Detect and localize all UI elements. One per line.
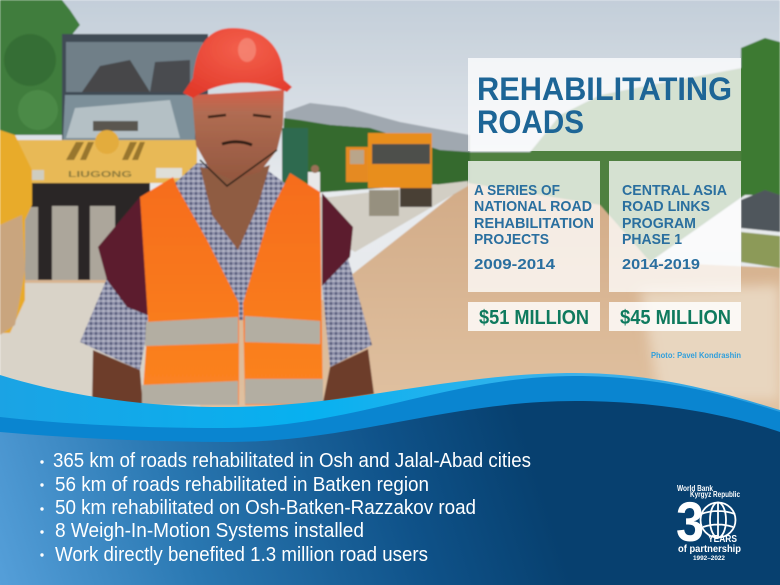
panel: national road rehabilitation projects: REHABILITATION bbox=[474, 215, 594, 232]
results bullet list: 8 Weigh-In-Motion Systems installed bbox=[55, 520, 364, 542]
panel: Central Asia Road Links: PHASE 1 bbox=[622, 231, 682, 248]
results bullet list: Work directly benefited 1.3 million road users bbox=[55, 544, 428, 566]
results bullet list: 365 km of roads rehabilitated in Osh and Jalal-Abad cities bbox=[53, 450, 531, 472]
worker sleeves bbox=[80, 255, 372, 370]
panel: national road rehabilitation projects: PROJECTS bbox=[474, 231, 549, 248]
panel: national road rehabilitation projects bbox=[468, 161, 600, 292]
title panel: REHABILITATING bbox=[477, 71, 732, 107]
panel: Central Asia Road Links: 2014-2019 bbox=[622, 256, 700, 273]
results bullet list: 50 km rehabilitated on Osh-Batken-Razzakov road bbox=[55, 497, 476, 519]
photo: road worker in front of road machinery: LIUGONG bbox=[68, 170, 132, 179]
photo credit: Photo: Pavel Kondrashin bbox=[651, 351, 741, 360]
funding: $45 million: $45 MILLION bbox=[620, 307, 731, 329]
funding: $51 million: $51 MILLION bbox=[479, 307, 589, 329]
panel: national road rehabilitation projects: 2009-2014 bbox=[474, 256, 556, 273]
helmet bbox=[183, 28, 292, 98]
dump truck bbox=[346, 147, 370, 182]
title panel bbox=[468, 58, 741, 151]
panel: Central Asia Road Links: CENTRAL ASIA bbox=[622, 182, 727, 199]
panel: national road rehabilitation projects: A SERIES OF bbox=[474, 182, 560, 199]
face bbox=[192, 90, 284, 180]
shirt bbox=[175, 163, 297, 320]
logo: World Bank 30 years: World Bank bbox=[677, 484, 713, 493]
photo: road worker in front of road machinery bbox=[0, 0, 780, 440]
wave band bbox=[0, 373, 780, 585]
logo: World Bank 30 years: YEARS bbox=[708, 534, 737, 545]
logo: World Bank 30 years bbox=[676, 484, 741, 562]
funding: $45 million bbox=[609, 302, 741, 331]
logo: World Bank 30 years: of partnership bbox=[678, 544, 741, 555]
panel: Central Asia Road Links: PROGRAM bbox=[622, 215, 696, 232]
ground bbox=[0, 183, 780, 440]
funding: $51 million bbox=[468, 302, 600, 331]
results bullet list: 56 km of roads rehabilitated in Batken region bbox=[55, 474, 429, 496]
vest bbox=[140, 177, 239, 405]
logo: World Bank 30 years: 3 bbox=[676, 490, 704, 553]
title panel: ROADS bbox=[477, 104, 584, 140]
roller wheels bbox=[22, 183, 150, 280]
front roller drum bbox=[0, 130, 32, 333]
sweater bbox=[98, 193, 353, 316]
logo: World Bank 30 years: Kyrgyz Republic bbox=[690, 490, 740, 499]
road roller body bbox=[15, 140, 197, 183]
worker arms bbox=[92, 349, 374, 406]
logo: World Bank 30 years: 1992–2022 bbox=[693, 555, 725, 562]
panel: Central Asia Road Links: ROAD LINKS bbox=[622, 198, 710, 215]
distant trees bbox=[282, 68, 745, 262]
panel: national road rehabilitation projects: NATIONAL ROAD bbox=[474, 198, 592, 215]
road roller cab bbox=[62, 34, 208, 142]
results bullet list bbox=[40, 450, 531, 566]
panel: Central Asia Road Links bbox=[609, 161, 741, 292]
